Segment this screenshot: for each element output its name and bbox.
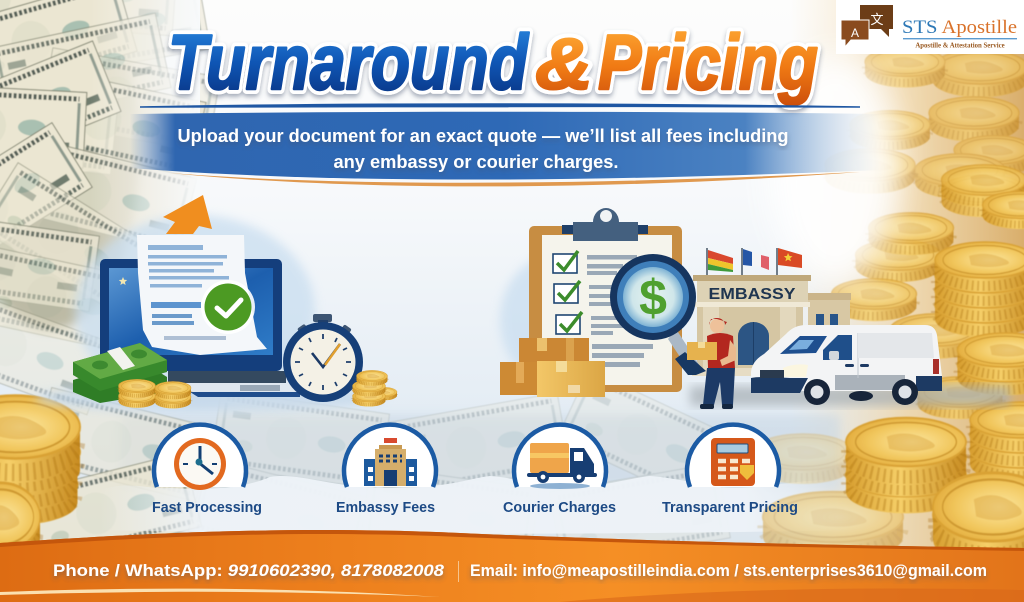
icon: stopwatch [283, 314, 363, 402]
contact bar [0, 530, 1024, 602]
embassy building [692, 275, 851, 376]
illustration: clipboard and embassy [500, 208, 1010, 409]
feature: Fast Processing [152, 425, 262, 516]
icon: coins near stopwatch [352, 370, 397, 407]
logo tagline: Apostille & Attestation Service [915, 42, 1005, 50]
feature: Courier Charges [503, 425, 616, 516]
gold coins background: right [753, 48, 1024, 569]
icon: magnifying glass with dollar [610, 254, 706, 375]
icon: upload arrow [163, 195, 212, 234]
label: Fast Processing [152, 500, 262, 516]
embassy sign: EMBASSY [708, 286, 796, 303]
title: Turnaround [168, 18, 529, 106]
phone text: Phone / WhatsApp: 9910602390, 8178082008 [53, 561, 445, 580]
flags [707, 248, 802, 275]
icon: clock [174, 438, 226, 490]
feature: Embassy Fees [336, 425, 436, 516]
icon: magnifying glass with dollar: $ [639, 270, 667, 326]
title: & [535, 25, 593, 105]
title [168, 18, 818, 106]
icon: translation speech bubbles [841, 5, 893, 47]
clipboard [529, 208, 682, 392]
label: Transparent Pricing [662, 500, 798, 516]
subtitle text: Upload your document for an exact quote — we’ll list all fees including [178, 125, 788, 146]
gold coins background: bottom left [0, 396, 80, 578]
checklist [553, 251, 582, 334]
icon: cash stack [73, 343, 167, 403]
label: Embassy Fees [336, 500, 435, 516]
document [137, 235, 267, 355]
icon: building [364, 438, 417, 486]
money notes background: left [0, 0, 220, 567]
parcels [500, 338, 605, 397]
illustration: upload laptop [35, 195, 397, 412]
logo wordmark: STS Apostille [902, 17, 1017, 38]
feature row wave [100, 476, 850, 534]
subtitle banner [130, 104, 880, 186]
icon: translation speech bubbles: 文 [870, 9, 884, 28]
title: Turnaround [168, 18, 529, 106]
title: Pricing [598, 18, 818, 106]
icon: translation speech bubbles: A [851, 26, 859, 40]
courier person [687, 318, 736, 409]
van [751, 325, 942, 405]
icon: calculator [711, 438, 755, 486]
icon: coins near cash [118, 379, 191, 409]
laptop [100, 259, 300, 397]
title: & [535, 25, 593, 105]
icon: green check badge [201, 280, 255, 334]
subtitle banner: any embassy or courier charges. [334, 151, 618, 172]
logo [836, 0, 1024, 54]
icon: truck [527, 443, 597, 489]
title: Pricing [598, 18, 818, 106]
feature: Transparent Pricing [662, 425, 798, 516]
email text: Email: info@meapostilleindia.com / sts.enterprises3610@gmail.com [470, 561, 987, 580]
label: Courier Charges [503, 500, 616, 516]
money notes background: lower centre [188, 370, 743, 572]
